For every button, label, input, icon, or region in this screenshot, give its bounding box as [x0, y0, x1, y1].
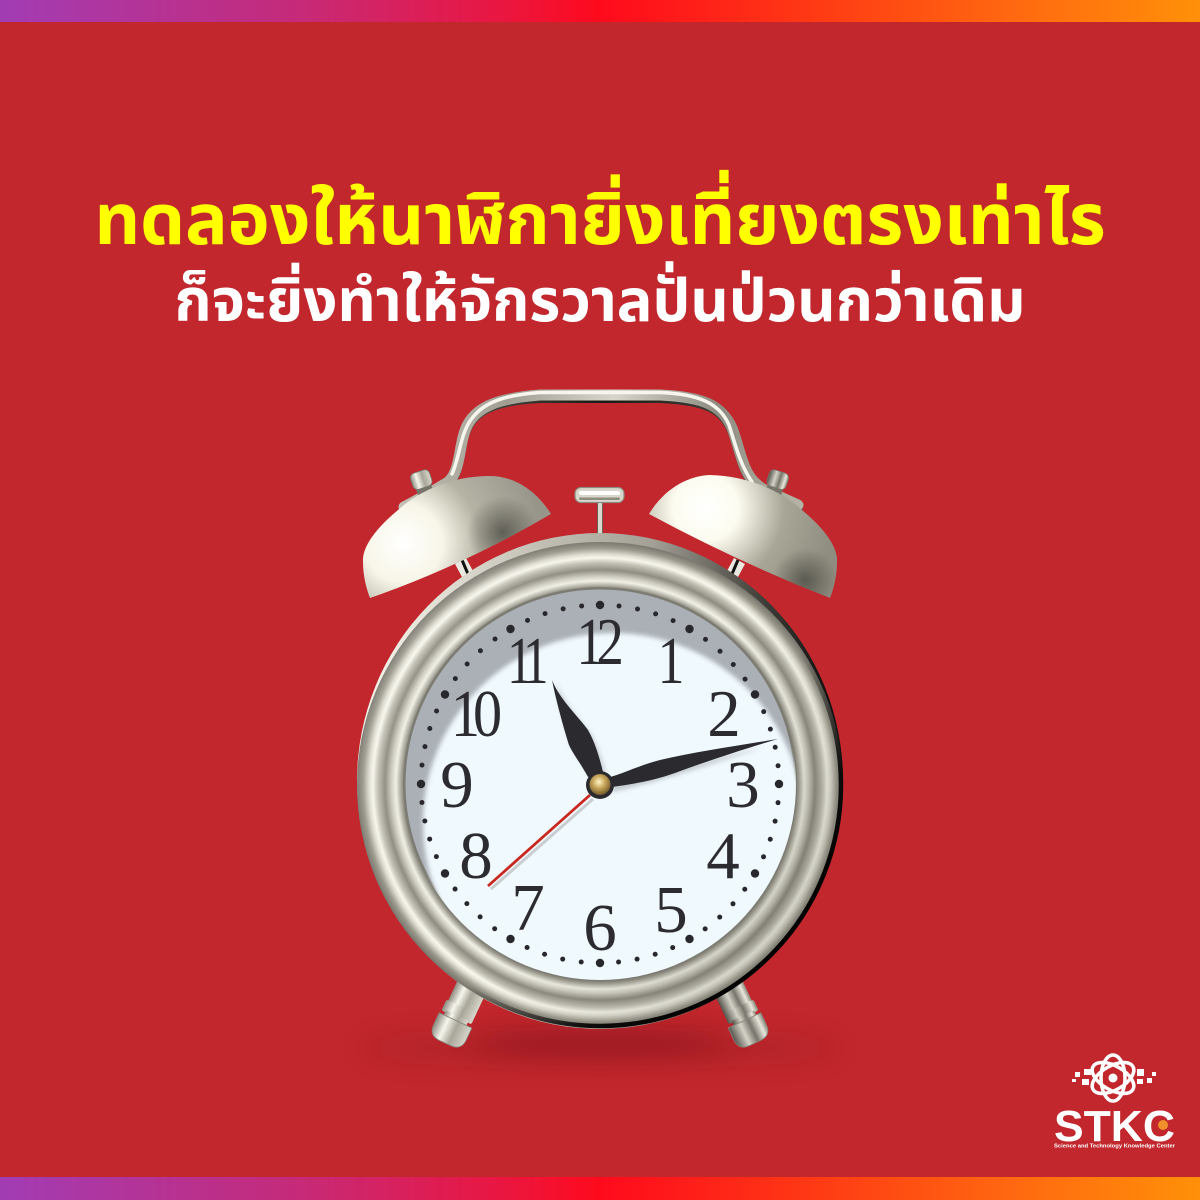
hour dots: [417, 601, 783, 967]
clock back casing: [357, 533, 843, 1029]
clock numerals: 10: [451, 676, 500, 751]
minute hand: [610, 739, 778, 792]
second hand: [488, 795, 593, 889]
clock numerals: 8: [459, 819, 493, 893]
clock numerals: 2: [707, 677, 741, 751]
clock numerals: 12: [576, 605, 622, 679]
clock numerals: 6: [583, 891, 617, 965]
top gradient bar: [0, 0, 1200, 22]
clock numerals: 5: [654, 873, 688, 947]
icon: left bell: [363, 476, 551, 598]
title: first line: ทดลองให้นาฬิกายิ่งเที่ยงตรงเท่าไร: [94, 181, 1106, 260]
clock numerals: [440, 605, 760, 965]
bottom gradient bar: [0, 1177, 1200, 1200]
icon: left bell knob: [409, 468, 435, 496]
illustration canvas: [357, 390, 1175, 1148]
clock centre hub: [586, 771, 614, 799]
icon: right bell: [649, 475, 837, 598]
icon: right foot: [707, 967, 771, 1051]
clock numerals: 1: [658, 624, 684, 698]
icon: bell supports: [455, 558, 745, 577]
logo pixel squares: [1072, 1069, 1156, 1085]
clock numerals: 4: [706, 819, 740, 893]
ground shadow: [360, 1033, 840, 1060]
minute dots: [421, 605, 779, 963]
logo: STKC: [1054, 1055, 1176, 1151]
icon: alarm pin: [575, 488, 624, 535]
icon: handle: [404, 392, 798, 509]
alarm clock: [357, 392, 843, 1051]
clock numerals: 3: [726, 748, 760, 822]
subtitle: second line: ก็จะยิ่งทำให้จักรวาลปั่นป่วนกว่าเดิม: [174, 267, 1026, 334]
icon: left foot: [429, 967, 493, 1051]
hour hand: [552, 680, 606, 778]
clock numerals: 7: [511, 871, 545, 945]
logo tagline: Science and Technology Knowledge Center: [1054, 1144, 1176, 1150]
logo atom icon: [1087, 1055, 1139, 1101]
clock numerals: 11: [507, 623, 546, 698]
clock metal rim: [357, 542, 843, 1028]
icon: right bell knob: [764, 468, 790, 496]
clock numerals: 9: [440, 748, 474, 822]
logo orange dot: [1158, 1120, 1168, 1130]
clock dial: [403, 587, 803, 1013]
logo wordmark: STKC: [1054, 1102, 1175, 1151]
